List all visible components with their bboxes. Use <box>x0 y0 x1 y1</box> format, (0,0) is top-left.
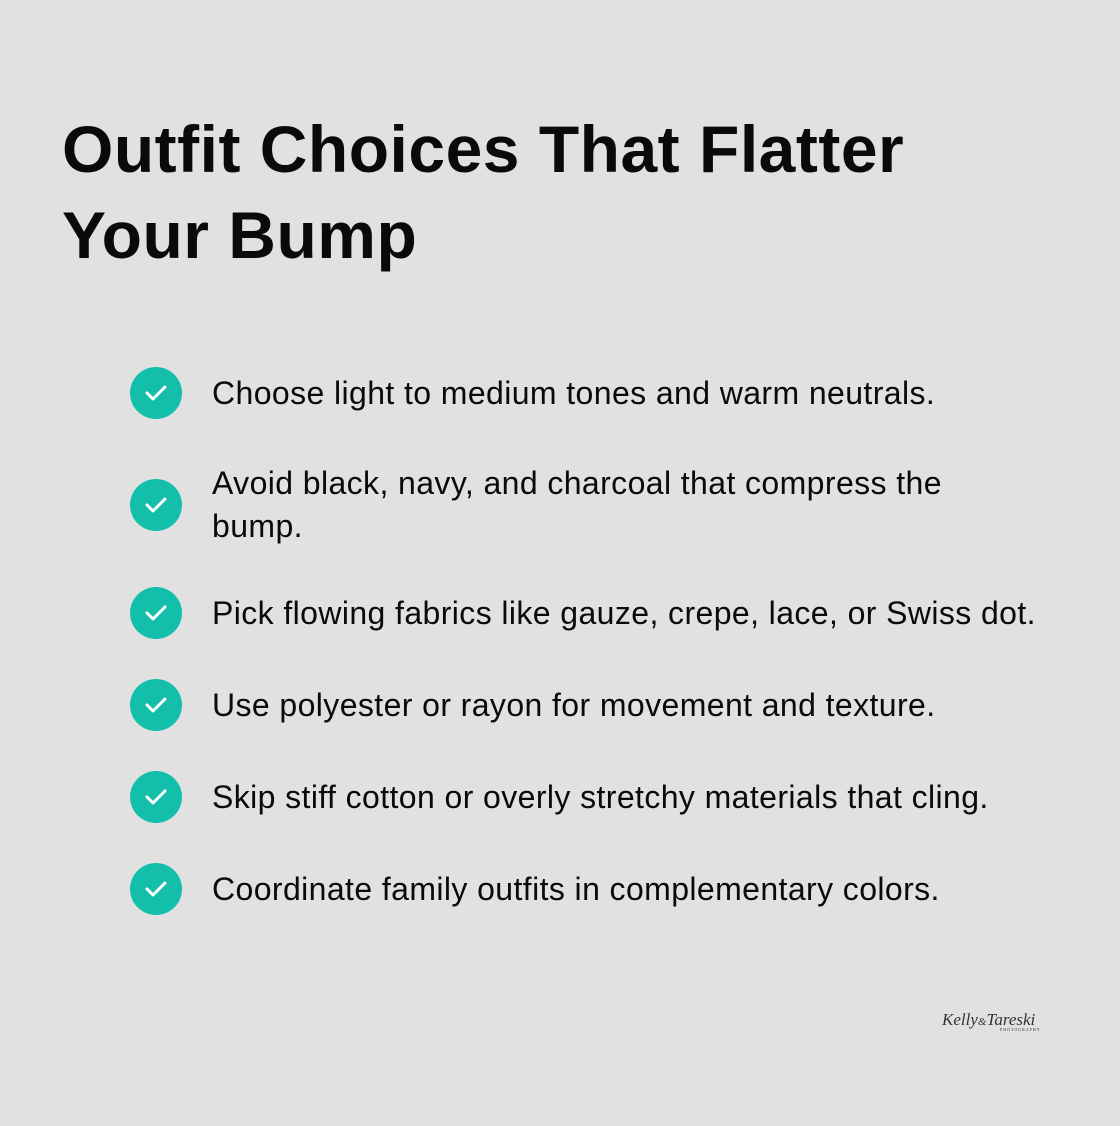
icon: check <box>130 367 182 419</box>
logo signature: PHOTOGRAPHY <box>1000 1027 1041 1032</box>
item 4: Use polyester or rayon for movement and texture. <box>212 686 936 722</box>
icon: check <box>130 771 182 823</box>
logo signature: Kelly&Tareski <box>942 1010 1035 1029</box>
icon: check <box>130 587 182 639</box>
item 3: Pick flowing fabrics like gauze, crepe, lace, or Swiss dot. <box>212 594 1036 630</box>
item 6 <box>130 863 940 915</box>
title: Outfit Choices That Flatter <box>62 112 904 186</box>
item 3 <box>130 587 1036 639</box>
item 2: bump. <box>212 508 303 544</box>
item 5 <box>130 771 989 823</box>
title: Your Bump <box>62 198 417 272</box>
item 4 <box>130 679 936 731</box>
item 2 <box>130 465 942 544</box>
title <box>62 112 904 272</box>
icon: check <box>130 479 182 531</box>
item 5: Skip stiff cotton or overly stretchy materials that cling. <box>212 778 989 814</box>
icon: check <box>130 863 182 915</box>
item 1: Choose light to medium tones and warm neutrals. <box>212 374 935 410</box>
item 2: Avoid black, navy, and charcoal that compress the <box>212 465 942 501</box>
icon: check <box>130 679 182 731</box>
item 6: Coordinate family outfits in complementary colors. <box>212 870 940 906</box>
item 1 <box>130 367 935 419</box>
